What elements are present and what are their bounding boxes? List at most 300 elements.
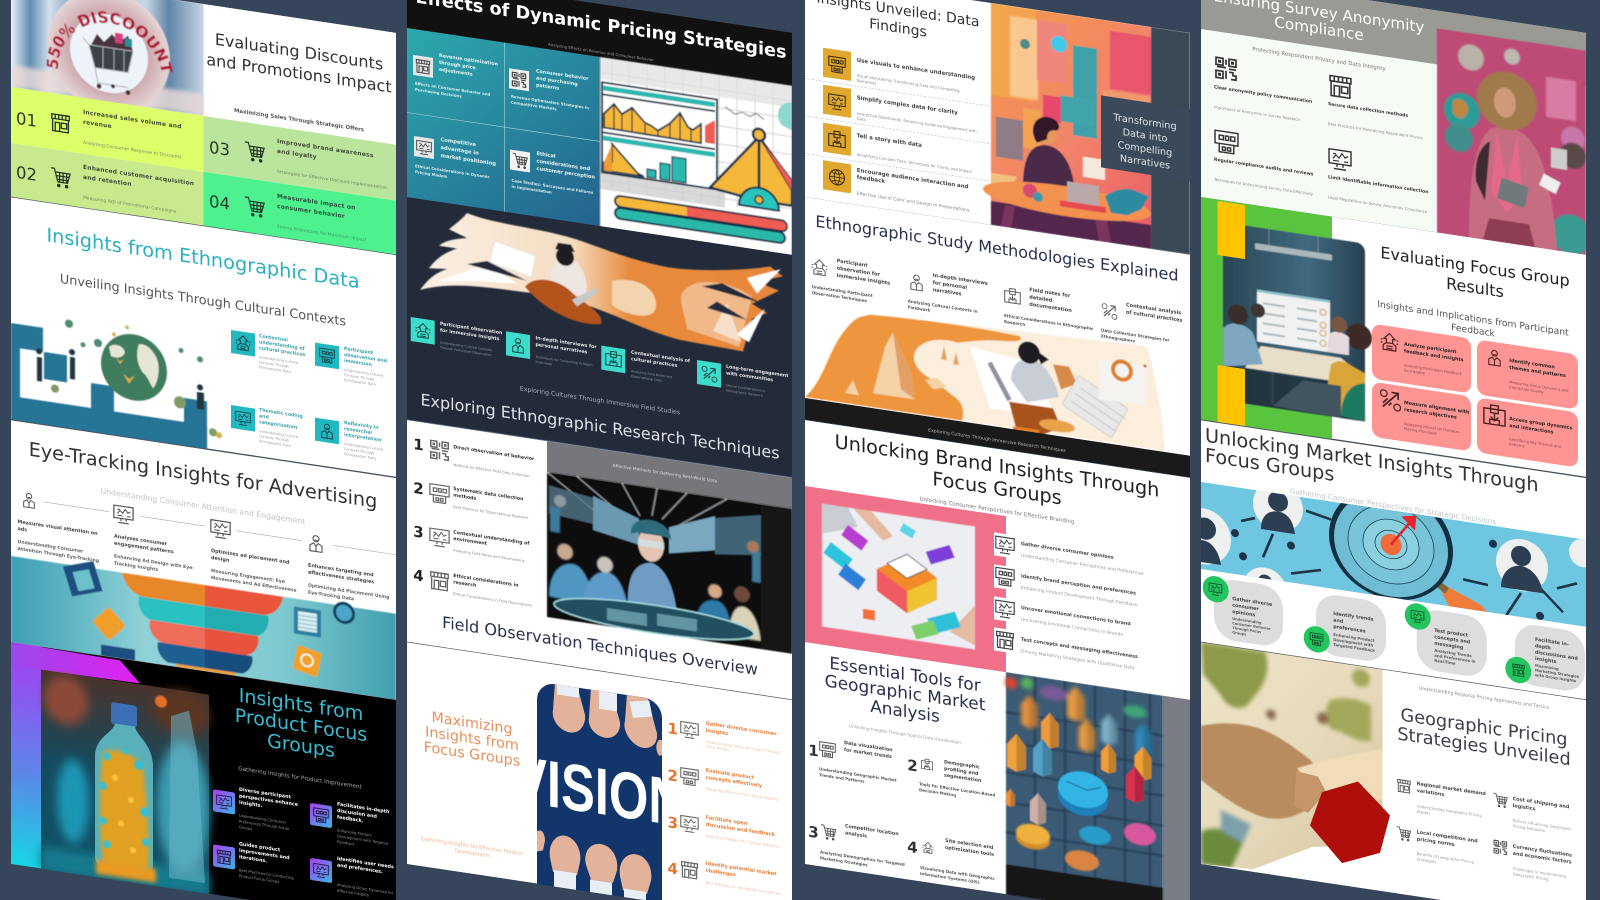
item 3: Product Focus Groups [239, 874, 279, 884]
card 2: Targeted Feedback [1333, 642, 1375, 653]
card 3: messaging [1434, 641, 1464, 651]
card 3: Assessing Impact on Decision- [1404, 422, 1461, 434]
band: item 02 [11, 143, 204, 227]
item: thematic coding: Understanding Cultural [259, 429, 298, 439]
slide: Eye-Tracking Insights for Advertising [11, 420, 396, 702]
item 2: Tools for Effective Location-Based [919, 781, 995, 798]
slide: Unlocking Market Insights Through Focus Groups [1175, 416, 1597, 701]
teal panel [407, 28, 600, 227]
item: revenue optimization: Effects on Consumer Behavior and [415, 81, 491, 97]
item: long-term engagement [697, 360, 789, 402]
title: Groups [267, 729, 335, 762]
item 1: Understanding Consumer [239, 814, 287, 825]
item 2: Interactive Dashboards: Enhancing Audience Engagement with [857, 111, 977, 134]
item 4: of cultural practices [1126, 309, 1183, 324]
item 3: Contextual understanding of [453, 529, 530, 547]
callout: Transforming Data into Compelling Narratives: Transforming [1112, 112, 1177, 133]
item 3: Techniques for Anonymizing Survey Data Effectively [1213, 177, 1314, 197]
item: in-depth interviews [506, 331, 597, 373]
item 3: 3 [808, 823, 819, 842]
item: competitive advantage: Ethical Considerations in Dynamic [415, 163, 490, 179]
item 4: Geographic Pricing [1513, 871, 1549, 882]
item: ethical considerations: Ethical [536, 151, 556, 160]
card 3: Analyzing Trends [1434, 648, 1472, 658]
slide: Insights from Product Focus Groups [11, 642, 396, 900]
subtitle: Understanding Regional Pricing Approaches and Tactics [1419, 686, 1550, 711]
item: in-depth interviews: personal narratives [536, 342, 587, 356]
item 4: Site selection and [945, 838, 994, 851]
item 2: Systematic data collection [453, 486, 523, 502]
card 1: Consumer Behavior [1232, 621, 1271, 631]
item: consumer behavior: and purchasing [536, 75, 578, 88]
item 2: 2 [413, 479, 424, 498]
item 2 [114, 505, 205, 580]
item 3: Competitor location [845, 823, 899, 837]
item: contextual understanding: Ethnographic Data [259, 365, 291, 374]
item: thematic coding: and [259, 413, 269, 421]
item: ethical considerations: in Implementation [512, 184, 552, 195]
callout: Transforming Data into Compelling Narratives: Narratives [1120, 153, 1170, 172]
item 1: Understanding Consumer Insights Through [706, 740, 780, 755]
subtitle: Protecting Respondent Privacy and Data Integrity [1252, 47, 1386, 73]
item: long-term engagement: Ethical Considerations in [726, 383, 765, 393]
title: Unlocking Brand Insights Through [835, 430, 1159, 502]
caption: Effective Methods for Gathering Real-World Data [613, 463, 717, 485]
item 2 [1493, 793, 1572, 837]
item 3: Best Practices for Conducting [239, 868, 294, 880]
item 4: challenges [706, 868, 736, 878]
item: contextual understanding: Contextual [259, 333, 288, 344]
item 3: Strategies [1417, 856, 1436, 864]
item 2: Demographic [944, 759, 980, 771]
card 3 [1372, 382, 1471, 452]
item 2: Enhancing Product [337, 828, 372, 838]
band: item 04: 04 [209, 192, 230, 214]
card 2: Identify trends [1333, 611, 1374, 623]
band: item 03: Strategies for Effective Discount Implementation [277, 169, 387, 191]
title: and Promotions Impact [206, 50, 392, 97]
card 1: Understanding [1232, 617, 1262, 625]
item 2: engagement patterns [114, 540, 174, 555]
item: thematic coding: Thematic coding [259, 407, 303, 420]
card 2: preferences [1333, 624, 1366, 635]
item 3: Analyzing Demographics for Targeted [820, 849, 905, 867]
image: brand cards around box [822, 504, 975, 650]
slide: Essential Tools for Geographic Market Analysis [805, 642, 1190, 900]
item 2: Enhancing Ad Design with Eye- [114, 553, 194, 571]
item 4: Driving Marketing Strategies with Qualitative Data [1021, 648, 1135, 671]
item 4 [308, 535, 396, 600]
item 3: Tell a story with data [857, 133, 922, 149]
band: item 03: and loyalty [277, 148, 317, 161]
item 1: Understanding Consumer [18, 539, 84, 555]
item 3: design [211, 555, 230, 564]
card 2: Measuring Group Dynamics and [1509, 380, 1569, 393]
item 1 [668, 715, 780, 760]
item 3: Simplifying Complex Data: Techniques for Clarity and Impact [857, 152, 973, 174]
image: VISION hands: VISION [513, 742, 685, 842]
item: competitive advantage: Competitive [440, 137, 476, 148]
slide: Ensuring Survey Anonymity Compliance [1201, 0, 1591, 258]
item 1 [994, 532, 1144, 578]
item 4 [1101, 298, 1183, 351]
item 3: improvements and [239, 848, 290, 861]
item 3: 3 [668, 813, 678, 833]
item: thematic coding: categorization [259, 419, 297, 431]
item: reflexivity: Contexts Through [344, 447, 374, 455]
band: item 01 [11, 87, 204, 172]
item 4: Effective Insights [337, 889, 369, 897]
callout: Transforming Data into Compelling Narratives: Compelling [1118, 140, 1172, 159]
item 3: iterations. [239, 854, 267, 864]
item 2: 2 [668, 766, 678, 786]
item: contextual understanding: cultural practices [259, 345, 305, 358]
item 1: Clear anonymity policy communication [1214, 84, 1312, 105]
item 1: Understanding Participant [812, 284, 873, 298]
item 1: ads [18, 526, 27, 533]
item 1: Gather diverse consumer [706, 721, 777, 738]
item 3: Analyzing Feedback for Concept Validation [706, 834, 780, 849]
item 1 [812, 255, 890, 307]
item: in-depth interviews: In-depth interviews for [536, 335, 597, 351]
item 4 [907, 832, 995, 887]
item 1: variations [1417, 788, 1444, 798]
item 2 [823, 85, 977, 139]
item 4: effectiveness strategies [308, 570, 374, 585]
card 2: and [1333, 617, 1344, 625]
card 2 [1477, 339, 1578, 410]
item: thematic coding [231, 405, 302, 447]
card 3: Making Processes [1404, 427, 1437, 436]
title: Focus Groups [424, 740, 520, 770]
image: woman with tablet [1437, 28, 1591, 258]
item 3 [808, 818, 905, 873]
gray side [1163, 696, 1190, 900]
item 4: Legal Regulations on Survey Anonymity Compliance [1328, 194, 1428, 214]
item 2: Pricing Decisions [1513, 823, 1545, 833]
band: item 04: Timing Promotions for Maximum Impact [276, 224, 367, 243]
item 4: Optimizing Ad Placement Using [308, 583, 389, 601]
item 1 [1214, 57, 1312, 124]
band: item 02: Enhanced customer acquisition [83, 164, 194, 187]
item 2 [310, 802, 390, 846]
item 2: Designing Effective Focus Group Sessions [706, 787, 779, 802]
band: item 02: Measuring ROI of Promotional Campaigns [83, 195, 177, 215]
image: map with pawns and pie [1005, 672, 1163, 900]
item 2: concepts effectively [706, 775, 763, 789]
item: revenue optimization [413, 49, 498, 104]
item 4: Test concepts and messaging effectiveness [1021, 637, 1138, 660]
item 3: Uncovering Emotional Connections to Brands [1021, 617, 1123, 638]
band: item 03: 03 [209, 138, 230, 160]
item 3 [668, 809, 780, 849]
card 3: concepts and [1434, 634, 1471, 646]
green side panel [1201, 197, 1332, 439]
item 3: Benefits of Geographic Pricing [1417, 851, 1475, 865]
image: marketing funnel [11, 549, 396, 702]
card 4: Access group dynamics [1509, 416, 1572, 432]
item 2: Secure data collection methods [1328, 101, 1408, 119]
item 2: Enhancing Product Development Through Feedback [1021, 585, 1138, 608]
item 4: Enhances targeting and [308, 563, 374, 578]
red hexagon [1310, 774, 1390, 870]
callout: Transforming Data into Compelling Narratives: Data into [1123, 127, 1167, 145]
card 3 [1405, 602, 1487, 679]
item 3 [1004, 283, 1094, 337]
item 1 [823, 48, 975, 101]
card 2: Interaction Quality [1509, 385, 1545, 395]
title: Ethnographic Study Methodologies Explained [815, 212, 1179, 285]
title: Compliance [1274, 13, 1364, 44]
item 2 [994, 564, 1138, 609]
item 3: Analyzing Field Notes and Observations [453, 548, 525, 563]
card 1: feedback and insights [1404, 348, 1464, 363]
title: Results [1446, 274, 1504, 301]
card 3: Real-Time [1434, 658, 1456, 666]
card 3: and Preferences in [1434, 653, 1476, 664]
item 1 [18, 492, 109, 566]
item 3: analysis [845, 830, 867, 840]
item 1: Visual Storytelling: Transforming Data into Compelling [857, 73, 960, 93]
item 2: for personal [933, 280, 967, 291]
column 4 of slides [1175, 0, 1597, 900]
title: Strategies Unveiled [1397, 724, 1571, 770]
item 3: Optimizes ad placement and [211, 548, 290, 566]
title: Findings [869, 16, 927, 41]
item: participant observation: Through Participant Observation [439, 345, 492, 357]
item 2: Development with Targeted [337, 834, 389, 846]
item 2: Best Practices for Observational Research [453, 505, 528, 520]
item 4: Information Systems (GIS) [920, 871, 980, 885]
title: Geographic Market [825, 672, 986, 716]
item 1: Participant [837, 258, 868, 269]
item 4: optimization tools [945, 845, 994, 858]
slide: Insights from Ethnographic Data [11, 197, 396, 478]
item 1: Gather diverse consumer opinions [1021, 541, 1114, 561]
item 1: Narratives [857, 78, 876, 86]
image: handshake over map [1201, 642, 1383, 891]
item: competitive advantage: Pricing Models [415, 169, 448, 179]
item 1: Trends and Patterns [819, 772, 865, 784]
item: participant observation: Contexts Through [344, 373, 374, 381]
subtitle: Gathering Insights for Effective Product [421, 836, 523, 857]
item: participant observation [411, 317, 502, 359]
item 1 [413, 435, 535, 479]
item 3: detailed [1029, 294, 1053, 304]
item: in-depth interviews: Techniques for Conducting In-Depth [535, 355, 593, 367]
item 1: Diverse participant [239, 787, 292, 801]
item 3: 3 [413, 523, 424, 542]
card 4: discussions and [1535, 650, 1578, 662]
subtitle: Insights and Implications from Participant [1377, 299, 1569, 339]
subtitle: Analyzing Effects on Revenue and Consumer Behavior [548, 42, 654, 63]
item 1: insights [706, 728, 728, 737]
item: contextual analysis: cultural practices [631, 356, 677, 369]
item 1: Attention Through Eye-Tracking [18, 546, 99, 564]
item: competitive advantage [414, 133, 496, 186]
item: reflexivity [315, 416, 383, 462]
item 4: Analyzing Group Dynamics for [337, 883, 394, 895]
item 4 [413, 566, 532, 608]
item 1: for market trends [844, 747, 892, 760]
image: 550% discount shopping cart [11, 0, 205, 116]
title: Geographic Pricing [1400, 705, 1568, 751]
band: item 02: 02 [16, 163, 37, 185]
item 2 [668, 762, 779, 802]
item 4: Visualizing Data with Geographic [920, 865, 995, 881]
item 3 [1213, 130, 1314, 197]
slide: Unlocking Brand Insights Through Focus Groups [805, 420, 1190, 700]
item 2: Decision-Making [919, 787, 956, 798]
item: consumer behavior: patterns [536, 82, 559, 92]
item 3 [213, 842, 294, 884]
item 2 [907, 754, 995, 804]
column 3 of slides [805, 0, 1190, 900]
slide: Insights Unveiled: Data Findings [805, 0, 1190, 255]
item 2: discussion and [337, 808, 377, 820]
item 4 [994, 627, 1138, 672]
card 2: Enhancing Product [1333, 632, 1375, 643]
item: long-term engagement: with communities [726, 370, 773, 383]
item: participant observation: Participant [344, 346, 374, 356]
subtitle: Gathering Insights for Product Improvement [238, 766, 363, 791]
pink panel [805, 486, 1006, 672]
image: VISION hands [513, 676, 685, 900]
card 1: Gather diverse [1232, 596, 1273, 608]
item 2 [413, 479, 528, 520]
card 2: Identify common [1509, 358, 1555, 371]
band: item 03: Improved brand awareness [277, 138, 374, 159]
subtitle: Unlocking Consumer Perspectives for Effective Branding [920, 496, 1074, 526]
band: item 04 [204, 172, 396, 256]
item 1: Measures visual attention on [18, 519, 98, 537]
slide: Effects of Dynamic Pricing Strategies [407, 0, 792, 256]
item 4: Best Practices for Facilitating Focus Groups [706, 881, 781, 896]
item 4: Effective Use of Color and Design in Presentations [857, 191, 970, 214]
card 4 [1477, 397, 1578, 468]
item 4: 4 [668, 859, 678, 879]
image: woman with data [983, 2, 1190, 255]
item 3 [413, 523, 530, 564]
item: consumer behavior: Consumer behavior [536, 68, 589, 82]
item: thematic coding: Ethnographic Data [259, 439, 291, 448]
item 4 [310, 856, 394, 896]
item 2: segmentation [944, 772, 982, 784]
item 1: 1 [668, 719, 678, 739]
subtitle: Unlocking Insights Through Spatial Data Visualization [849, 723, 961, 745]
card 4: depth [1535, 643, 1551, 652]
black footer band [805, 398, 1190, 477]
card 1: consumer [1232, 603, 1259, 613]
item 2: Evaluate product [706, 768, 754, 781]
card 1: Through Focus [1232, 626, 1261, 634]
item: ethical considerations: customer perception [536, 166, 595, 181]
gradient side strip [11, 642, 41, 868]
illustration: globe and people [11, 308, 222, 452]
card 4: with Group Insights [1535, 673, 1577, 683]
title: Essential Tools for [829, 654, 981, 696]
item: revenue optimization: adjustments [439, 67, 473, 78]
card 2: Development with [1333, 637, 1374, 648]
item 4: Encourage audience interaction and [857, 168, 969, 191]
caption: Exploring Cultures Through Immersive Research Techniques [928, 428, 1066, 454]
item 2: Tracking Insights [114, 560, 158, 573]
band: item 04: Measurable impact on [277, 193, 356, 212]
card 4: and interactions [1509, 423, 1554, 436]
item: reflexivity: Reflexivity in [344, 420, 379, 431]
title: Evaluating Focus Group [1380, 243, 1570, 290]
item 4: Challenges in Implementing [1513, 866, 1566, 879]
item 3: Facilitate open [706, 815, 748, 827]
slide: Field Observation Techniques Overview [407, 420, 792, 700]
item: contextual understanding: Understanding Cultural [259, 355, 298, 365]
card 4 [1505, 621, 1585, 694]
column 2 of slides [407, 0, 792, 900]
card 2: themes and patterns [1509, 365, 1566, 379]
slide: Maximizing Insights from Focus Groups [407, 642, 792, 900]
item 3: pricing norms [1417, 836, 1455, 848]
caption: Exploring Cultures Through Immersive Field Studies [520, 385, 680, 416]
item 1: Groups [239, 825, 252, 831]
item 4 [668, 855, 781, 896]
item 3 [823, 123, 973, 174]
card 3: research objectives [1404, 407, 1457, 421]
item 3: Research [1004, 319, 1025, 327]
item: participant observation [315, 342, 387, 388]
title: Field Observation Techniques Overview [442, 613, 758, 679]
item: participant observation: Ethnographic Data [344, 378, 376, 387]
item: contextual understanding: Contexts Through [259, 360, 289, 369]
item: contextual analysis: Analyzing Field Notes and [631, 369, 672, 379]
item 2: Factors Influencing Geographic [1513, 818, 1572, 832]
item 4: Currency fluctuations [1513, 844, 1572, 859]
item: participant observation: Understanding Cultural [344, 368, 383, 378]
slide: Geographic Pricing Strategies Unveiled [1201, 642, 1586, 900]
card 2 [1304, 590, 1386, 664]
item: contextual understanding [231, 329, 306, 376]
item: long-term engagement: Long-term engagement [726, 364, 789, 379]
subtitle: Understanding Consumer Attention and Engagement [101, 486, 305, 526]
item 1: Models [1417, 809, 1430, 816]
item: long-term engagement: Ethnographic Research [726, 388, 763, 398]
item 3: discussion and feedback [706, 822, 775, 838]
subtitle: Maximizing Sales Through Strategic Offers [234, 108, 364, 133]
item 3: Measuring Engagement: Eye [211, 568, 285, 585]
item 4: Ethical Considerations in Field Observations [453, 592, 532, 608]
item 4: Identify potential market [706, 861, 777, 878]
item 1: Regional market demand [1417, 781, 1486, 797]
item: in-depth interviews: Interviews [536, 360, 552, 366]
item 1: Importance of Anonymity in Survey Research [1214, 104, 1300, 122]
slide: Exploring Ethnographic Research Techniques [407, 197, 792, 477]
item 1: Understanding Consumer Perceptions and Preferences [1021, 553, 1144, 577]
item 2: feedback. [337, 814, 364, 824]
card 4: Patterns [1509, 442, 1525, 449]
title: Insights from [239, 684, 363, 725]
title: Product Focus [235, 704, 367, 746]
item 1: Data visualization [844, 740, 893, 753]
item 3: Field notes for [1029, 287, 1071, 299]
card 1: Analyze participant [1404, 341, 1457, 355]
item 1 [808, 735, 897, 789]
item 2 [908, 269, 988, 321]
item 2: Simplify complex data for clarity [857, 95, 958, 116]
item 4: research [453, 579, 476, 589]
subtitle: Feedback [1451, 322, 1496, 340]
item 1: insights. [239, 800, 262, 809]
item 4: Limit identifiable information collection [1328, 174, 1428, 195]
item 2: Best Practices for Maintaining Respondent Privacy [1328, 121, 1424, 140]
